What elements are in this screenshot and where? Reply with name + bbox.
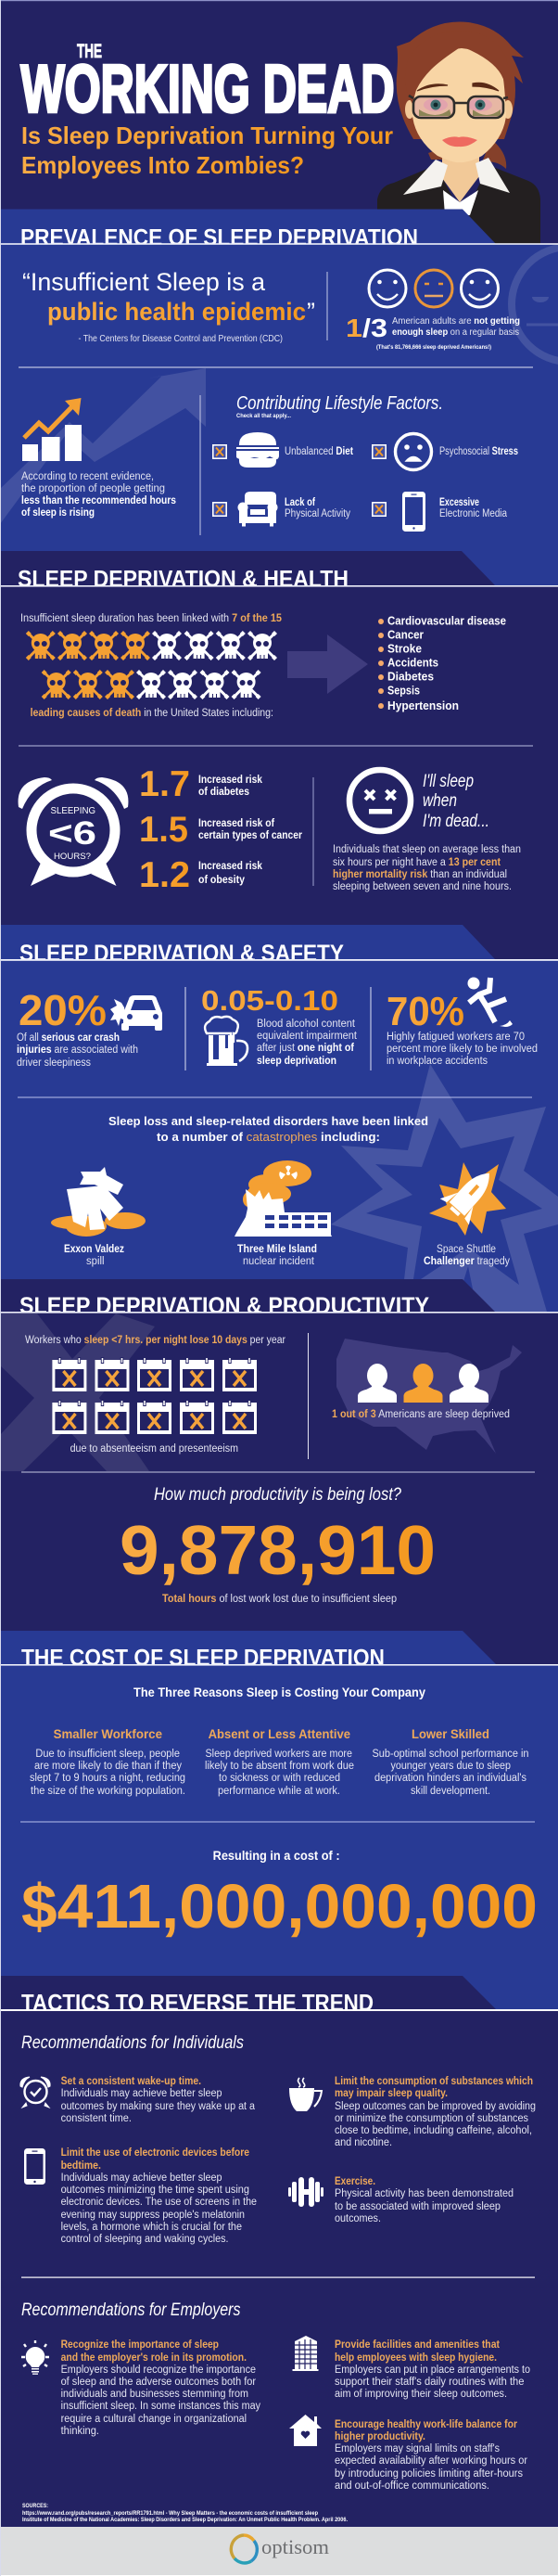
stat: one third: American adults are not getting bbox=[392, 315, 520, 327]
tactic: facilities: Provide facilities and amenities that bbox=[335, 2339, 500, 2351]
tactic: work-life balance: higher productivity. bbox=[335, 2431, 425, 2442]
stats: increased risk: certain types of cancer bbox=[198, 830, 302, 841]
heading: sleep deprivation and productivity bbox=[1, 1279, 495, 1319]
column: lower skilled: Sub-optimal school performance in bbox=[373, 1749, 528, 1760]
stats: increased risk: 1.2 bbox=[139, 855, 190, 895]
tactic: recognize importance: Recognize the importance of sleep bbox=[61, 2339, 219, 2351]
label: excessive electronic media: Electronic Media bbox=[439, 508, 508, 519]
heading: contributing lifestyle factors: Contributing Lifestyle Factors. bbox=[236, 393, 443, 414]
column: absent or less attentive bbox=[205, 1726, 354, 1797]
text: i'll sleep when i'm dead: when bbox=[423, 791, 457, 811]
stat: twenty percent: driver sleepiness bbox=[17, 1057, 91, 1069]
heading: sleep deprivation and safety: SLEEP DEPRIVATION & SAFETY bbox=[19, 941, 344, 967]
column: absent or less attentive: to sickness or with reduced bbox=[219, 1773, 340, 1784]
stat: twenty percent: 20% bbox=[19, 986, 107, 1034]
big number: total cost: $411,000,000,000 bbox=[21, 1872, 538, 1942]
icon: phone bbox=[402, 492, 425, 532]
tactic: limit devices: electronic devices. The use of screens in the bbox=[61, 2197, 257, 2208]
label: three mile island bbox=[237, 1244, 317, 1267]
list: causes of death: Hypertension bbox=[387, 698, 459, 712]
icon: small alarm clock bbox=[20, 2077, 50, 2108]
tactic: limit substances: may impair sleep quality. bbox=[335, 2088, 448, 2099]
icon: alarm clock: HOURS? bbox=[54, 852, 91, 861]
text: catastrophes intro: to a number of catastrophes including: bbox=[157, 1130, 380, 1144]
icons: calendars bbox=[52, 1357, 257, 1434]
label: space shuttle challenger: Space Shuttle bbox=[437, 1244, 496, 1255]
tactic: limit devices bbox=[61, 2147, 257, 2245]
tactic: recognize importance: and the employer's role in its promotion. bbox=[61, 2352, 247, 2364]
column: smaller workforce: the size of the working population. bbox=[31, 1786, 185, 1797]
illustration: tired woman with glasses bbox=[377, 21, 540, 244]
text: evidence: the proportion of people getting bbox=[21, 483, 165, 494]
panel: tactics bbox=[0, 2009, 558, 2527]
text: mortality risk: sleeping between seven and nine hours. bbox=[333, 881, 512, 892]
label: exxon valdez: Exxon Valdez bbox=[64, 1244, 124, 1255]
stat: blood alcohol bbox=[201, 984, 358, 1067]
question: How much productivity is being lost? bbox=[154, 1485, 401, 1505]
subtitle bbox=[21, 122, 393, 179]
heading: sleep deprivation and health bbox=[1, 551, 495, 592]
tactic: wake-up time: Individuals may achieve better sleep bbox=[61, 2088, 222, 2099]
tactic: limit devices: bedtime. bbox=[61, 2160, 101, 2172]
quote: ” bbox=[307, 298, 315, 326]
map: united states bbox=[336, 1339, 522, 1454]
icon: armchair bbox=[237, 492, 278, 527]
tactic: exercise bbox=[335, 2176, 514, 2224]
text: mortality risk: Individuals that sleep on average less than bbox=[333, 844, 521, 855]
tactic: work-life balance: Encourage healthy work-life balance for bbox=[335, 2419, 517, 2430]
text: absenteeism: due to absenteeism and presenteeism bbox=[70, 1443, 238, 1455]
tactic: facilities: help employees with sleep hygiene. bbox=[335, 2352, 497, 2364]
icon: oil spill ship bbox=[51, 1167, 146, 1237]
tactic: work-life balance: by introducing policies limiting after-hours bbox=[335, 2468, 523, 2480]
column: lower skilled: deprivation hinders an individual's bbox=[374, 1773, 526, 1784]
icon: nuclear plant bbox=[235, 1160, 332, 1237]
arrow bbox=[287, 634, 368, 694]
text: i'll sleep when i'm dead: I'm dead... bbox=[423, 812, 489, 831]
tactic: limit substances bbox=[335, 2076, 536, 2148]
icon: dead face bbox=[349, 770, 411, 831]
quote: “Insufficient Sleep is a bbox=[22, 268, 266, 296]
tactic: limit devices: levels, a hormone which is crucial for the bbox=[61, 2222, 242, 2233]
column: smaller workforce: slept 7 to 9 hours a night, reducing bbox=[30, 1773, 185, 1784]
tactic: recognize importance: thinking. bbox=[61, 2426, 99, 2437]
tactic: work-life balance bbox=[335, 2419, 527, 2492]
heading: prevalence of sleep deprivation: PREVALENCE OF SLEEP DEPRIVATION bbox=[20, 224, 418, 250]
quote: - The Centers for Disease Control and Prevention (CDC) bbox=[78, 334, 283, 344]
icon: small phone bbox=[24, 2148, 45, 2185]
stat: blood alcohol: after just one night of bbox=[257, 1043, 354, 1054]
list: causes of death: Cardiovascular disease bbox=[387, 613, 506, 627]
icon: stressed face bbox=[395, 434, 432, 469]
heading: prevalence of sleep deprivation bbox=[1, 210, 496, 250]
tactic: limit substances: or minimize the consumption of substances bbox=[335, 2113, 528, 2124]
text: lost days: Workers who sleep <7 hrs. per night lose 10 days per year bbox=[25, 1335, 285, 1346]
text: catastrophes intro: Sleep loss and sleep-related disorders have been linked bbox=[108, 1114, 428, 1128]
heading: sleep deprivation and productivity: SLEEP DEPRIVATION & PRODUCTIVITY bbox=[19, 1293, 429, 1319]
tactic: recognize importance: individuals and businesses stemming from bbox=[61, 2389, 248, 2400]
tactic: work-life balance: expected availability after working hours or bbox=[335, 2455, 527, 2467]
label: exxon valdez: spill bbox=[86, 1256, 104, 1267]
column: absent or less attentive: Absent or Less Attentive bbox=[209, 1726, 350, 1741]
tactic: recognize importance: insufficient sleep. In some instances this may bbox=[61, 2401, 260, 2412]
label: excessive electronic media bbox=[439, 497, 508, 519]
list: causes of death bbox=[378, 613, 506, 712]
column: lower skilled: skill development. bbox=[411, 1786, 490, 1797]
stat: one third: enough sleep on a regular basis bbox=[392, 327, 519, 338]
title: the working dead bbox=[20, 41, 395, 126]
stats: increased risk: 1.5 bbox=[139, 810, 188, 850]
text: mortality risk: higher mortality risk than an individual bbox=[333, 869, 507, 880]
icon: alarm clock: <6 bbox=[48, 815, 96, 852]
column: smaller workforce bbox=[30, 1726, 185, 1797]
stats: increased risk: Increased risk bbox=[198, 775, 263, 786]
list: causes of death: Sepsis bbox=[387, 683, 420, 697]
text: evidence bbox=[21, 471, 176, 519]
column: smaller workforce: are more likely to die than if they bbox=[34, 1761, 182, 1772]
label: exxon valdez bbox=[64, 1244, 124, 1267]
stat: twenty percent: injuries are associated with bbox=[17, 1044, 138, 1056]
panel: cost bbox=[0, 1664, 558, 2010]
list: causes of death: Diabetes bbox=[387, 669, 434, 683]
tactic: limit substances: close to bedtime, including caffeine, alcohol, bbox=[335, 2125, 532, 2136]
icon: rising chart bbox=[22, 398, 82, 461]
icons: skull rows bbox=[26, 631, 277, 699]
heading: contributing lifestyle factors bbox=[236, 393, 443, 419]
tactic: limit substances: Limit the consumption of substances which bbox=[335, 2076, 533, 2087]
stats: increased risk: Increased risk bbox=[198, 861, 263, 872]
text: i'll sleep when i'm dead: I'll sleep bbox=[423, 772, 474, 791]
tactic: limit devices: outcomes minimizing the time spent using bbox=[61, 2185, 249, 2196]
stat: one third: (That's 81,766,666 sleep deprived Americans!) bbox=[376, 345, 491, 351]
tactic: limit devices: evening may suppress people's melatonin bbox=[61, 2210, 245, 2221]
stat: seventy percent: percent more likely to be involved bbox=[387, 1044, 538, 1055]
tactic: recognize importance bbox=[61, 2339, 260, 2437]
text: i'll sleep when i'm dead bbox=[423, 772, 489, 831]
tactic: facilities bbox=[335, 2339, 530, 2400]
stats: increased risk: of obesity bbox=[198, 875, 246, 886]
icon: alarm clock bbox=[19, 777, 128, 886]
tactic: limit devices: Limit the use of electronic devices before bbox=[61, 2147, 249, 2159]
stat: blood alcohol: Blood alcohol content bbox=[257, 1019, 356, 1030]
icon: office building bbox=[293, 2336, 319, 2371]
checkboxes bbox=[213, 445, 386, 516]
tactic: facilities: aim of improving their sleep outcomes. bbox=[335, 2389, 507, 2400]
stats: increased risk bbox=[139, 764, 302, 895]
heading: tactics to reverse the trend: TACTICS TO REVERSE THE TREND bbox=[21, 1991, 374, 2017]
sources bbox=[22, 2504, 348, 2523]
text: evidence: According to recent evidence, bbox=[21, 471, 154, 482]
panel: health bbox=[0, 585, 558, 960]
subtitle: Is Sleep Deprivation Turning Your bbox=[21, 122, 393, 149]
tactic: facilities: Employers can put in place arrangements to bbox=[335, 2365, 530, 2376]
quote bbox=[22, 268, 315, 344]
background face decoration bbox=[512, 247, 558, 362]
stat: one third: 1/3 bbox=[346, 314, 387, 342]
stat: twenty percent: Of all serious car crash bbox=[17, 1032, 120, 1044]
tactic: recognize importance: require a cultural change in organizational bbox=[61, 2414, 247, 2425]
footer: optisom logo bbox=[0, 2527, 558, 2575]
column: lower skilled bbox=[373, 1726, 528, 1797]
heading: the cost of sleep deprivation: THE COST OF SLEEP DEPRIVATION bbox=[21, 1646, 385, 1672]
tactic: limit devices: Individuals may achieve better sleep bbox=[61, 2172, 222, 2184]
stat: seventy percent: Highly fatigued workers are 70 bbox=[387, 1032, 525, 1043]
tactic: wake-up time: consistent time. bbox=[61, 2113, 132, 2124]
tactic: recognize importance: Employers should recognize the importance bbox=[61, 2365, 256, 2376]
sources: SOURCES: bbox=[22, 2504, 48, 2509]
tactic: limit devices: control of sleeping and waking cycles. bbox=[61, 2234, 228, 2245]
panel: productivity bbox=[0, 1312, 558, 1665]
text: leading causes: leading causes of death in the United States including: bbox=[31, 708, 273, 719]
list: causes of death: Cancer bbox=[387, 627, 424, 641]
label: three mile island: Three Mile Island bbox=[237, 1244, 317, 1255]
text: evidence: less than the recommended hours bbox=[21, 495, 176, 506]
column: smaller workforce: Smaller Workforce bbox=[54, 1726, 162, 1741]
subtitle: Employees Into Zombies? bbox=[21, 151, 304, 179]
text: one out of three: 1 out of 3 Americans are sleep deprived bbox=[332, 1409, 510, 1420]
column: absent or less attentive: likely to be absent from work due bbox=[205, 1761, 354, 1772]
heading: sleep deprivation and safety bbox=[1, 925, 495, 967]
subheading: three reasons: The Three Reasons Sleep is Costing Your Company bbox=[133, 1685, 425, 1699]
heading: employers: Recommendations for Employers bbox=[21, 2300, 241, 2320]
icon: falling man bbox=[467, 978, 513, 1027]
column: lower skilled: younger years due to sleep bbox=[391, 1761, 511, 1772]
tactic: work-life balance: Employers may signal limits on staff's bbox=[335, 2443, 500, 2454]
stat: seventy percent: 70% bbox=[387, 989, 464, 1034]
heading: sleep deprivation and health: SLEEP DEPRIVATION & HEALTH bbox=[18, 566, 349, 592]
icon: burger bbox=[236, 432, 279, 468]
tactic: wake-up time bbox=[61, 2076, 256, 2124]
icon: light bulb bbox=[21, 2340, 49, 2375]
text: catastrophes intro bbox=[108, 1114, 428, 1144]
label: three mile island: nuclear incident bbox=[243, 1256, 315, 1267]
label: space shuttle challenger: Challenger tragedy bbox=[424, 1256, 510, 1267]
background arrow decoration bbox=[0, 368, 206, 524]
list: causes of death: Accidents bbox=[387, 655, 438, 669]
tactic: limit substances: and nicotine. bbox=[335, 2137, 392, 2148]
text: seven of fifteen: Insufficient sleep duration has been linked with 7 of the 15 bbox=[20, 613, 283, 624]
stat: one third bbox=[346, 314, 520, 351]
label: excessive electronic media: Excessive bbox=[439, 497, 479, 508]
big number: lost hours: 9,878,910 bbox=[120, 1511, 436, 1589]
text: mortality risk: six hours per night have a 13 per cent bbox=[333, 857, 501, 868]
label: space shuttle challenger bbox=[424, 1244, 510, 1267]
sources: Institute of Medicine of the National Academies: Sleep Disorders and Sleep Deprivation: An Unmet Public Health Problem. April 2006. bbox=[22, 2518, 348, 2523]
heading: the cost of sleep deprivation bbox=[1, 1631, 496, 1672]
panel: hero header bbox=[0, 0, 558, 244]
icon: house with heart bbox=[289, 2415, 322, 2446]
tactic: wake-up time: outcomes by making sure they wake up at a bbox=[61, 2101, 256, 2112]
stat: seventy percent bbox=[387, 989, 538, 1067]
panel: safety bbox=[0, 959, 558, 1313]
text: mortality risk bbox=[333, 844, 521, 892]
label: lack of physical activity bbox=[285, 497, 350, 519]
heading: contributing lifestyle factors: Check all that apply... bbox=[236, 414, 291, 419]
tactic: recognize importance: of sleep and the adverse outcomes both for bbox=[61, 2377, 256, 2388]
stat: twenty percent bbox=[17, 986, 138, 1069]
heading: tactics to reverse the trend bbox=[1, 1976, 496, 2017]
icon: beer mug bbox=[205, 1017, 247, 1066]
list: causes of death: Stroke bbox=[387, 641, 422, 655]
icons: three faces bbox=[369, 270, 499, 307]
tactic: exercise: outcomes. bbox=[335, 2213, 381, 2224]
tactic: exercise: to be associated with improved sleep bbox=[335, 2201, 501, 2212]
column: smaller workforce: Due to insufficient sleep, people bbox=[35, 1749, 180, 1760]
background star decoration bbox=[331, 1064, 558, 1312]
icon: crashed car bbox=[110, 995, 162, 1031]
stat: blood alcohol: sleep deprivation bbox=[257, 1056, 336, 1067]
stat: blood alcohol: equivalent impairment bbox=[257, 1031, 358, 1042]
title: the working dead: WORKING DEAD bbox=[20, 52, 395, 126]
label: psychosocial stress: Psychosocial Stress bbox=[439, 446, 518, 457]
label: lack of physical activity: Physical Activity bbox=[285, 508, 350, 519]
tactic: exercise: Exercise. bbox=[335, 2176, 375, 2187]
caption: total hours: Total hours of lost work lost due to insufficient sleep bbox=[162, 1594, 397, 1605]
stats: increased risk: Increased risk of bbox=[198, 818, 274, 829]
title: the working dead: THE bbox=[77, 41, 102, 62]
icon: alarm clock: SLEEPING bbox=[50, 806, 95, 816]
panel: prevalence bbox=[0, 243, 558, 586]
icon: dumbbell bbox=[288, 2177, 323, 2207]
tactic: wake-up time: Set a consistent wake-up time. bbox=[61, 2076, 201, 2087]
text: resulting in a cost: Resulting in a cost of : bbox=[213, 1848, 340, 1863]
column: absent or less attentive: performance while at work. bbox=[218, 1786, 340, 1797]
label: lack of physical activity: Lack of bbox=[285, 497, 315, 508]
icons: three people bbox=[358, 1364, 488, 1403]
sources: https://www.rand.org/pubs/research_reports/RR1791.html - Why Sleep Matters - the economic costs of insufficient sleep bbox=[22, 2511, 318, 2517]
stat: blood alcohol: 0.05-0.10 bbox=[201, 984, 338, 1017]
column: absent or less attentive: Sleep deprived workers are more bbox=[206, 1749, 352, 1760]
stats: increased risk: of diabetes bbox=[198, 787, 249, 798]
label: unbalanced diet: Unbalanced Diet bbox=[285, 446, 353, 457]
tactic: work-life balance: and out-of-office communications. bbox=[335, 2480, 489, 2492]
wordmark: optisom bbox=[261, 2535, 329, 2558]
icon: logo ring bbox=[231, 2535, 257, 2563]
tactic: limit substances: Sleep outcomes can be improved by avoiding bbox=[335, 2101, 536, 2112]
stat: seventy percent: in workplace accidents bbox=[387, 1056, 488, 1067]
icon: coffee cup bbox=[289, 2078, 322, 2111]
heading: individuals: Recommendations for Individuals bbox=[21, 2033, 244, 2053]
text: evidence: of sleep is rising bbox=[21, 507, 95, 519]
tactic: exercise: Physical activity has been demonstrated bbox=[335, 2188, 514, 2199]
background x decoration bbox=[0, 1314, 155, 1471]
column: lower skilled: Lower Skilled bbox=[412, 1726, 489, 1741]
stats: increased risk: 1.7 bbox=[139, 764, 190, 804]
quote: public health epidemic bbox=[47, 298, 306, 326]
icon: exploding shuttle bbox=[429, 1160, 506, 1236]
tactic: facilities: support their staff's daily routines with the bbox=[335, 2377, 525, 2388]
